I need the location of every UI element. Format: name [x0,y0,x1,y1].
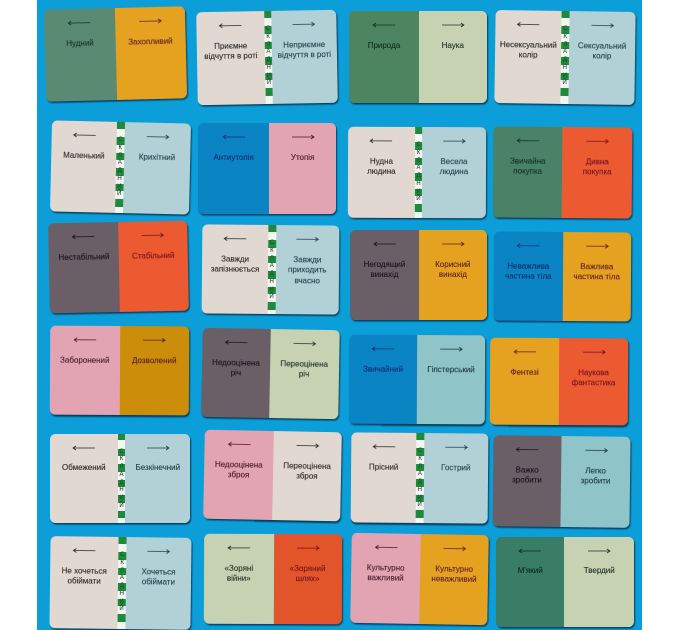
left side: Недооцінена річ [201,328,270,418]
strip: СКЛАДНИЙ: Д [117,167,122,174]
strip: СКЛАДНИЙ: С [417,448,422,454]
strip: СКЛАДНИЙ: К [563,33,567,39]
left side: Антиутопія: Антиутопія [213,153,254,162]
right side: Весела людина: людина [440,167,468,176]
left side: Фентезі: Фентезі [510,367,539,376]
strip: СКЛАДНИЙ: С [120,552,124,558]
strip: СКЛАДНИЙ: С [119,449,124,455]
strip: СКЛАДНИЙ: Н [562,64,567,70]
left side: Прісний: Прісний [368,462,398,472]
card: Завжди запізнюється / Завжди приходить вчасно [201,224,339,315]
strip: СКЛАДНИЙ: К [267,34,270,40]
left side: Культурно важливий [350,533,420,624]
strip: СКЛАДНИЙ: А [563,49,567,55]
left side: М'який: М'який [518,566,543,575]
strip: СКЛАДНИЙ: К [418,456,421,462]
left side: Неважлива частина тіла: частина тіла [505,272,551,281]
right side: Гострий: Гострий [441,463,470,472]
left side: «Зоряні війни» [204,534,274,624]
right side: Весела людина [422,127,486,217]
right side: Дозволений [119,326,189,415]
left side: Нудний [44,8,117,102]
right side: Сексуальний колір: Сексуальний [577,40,626,50]
strip: СКЛАДНИЙ [115,121,124,213]
left side: Не хочеться обіймати: обіймати [67,576,100,585]
left side: Природа: Природа [368,40,400,50]
right side: Крихітний [122,122,191,214]
strip: СКЛАДНИЙ: А [120,472,124,478]
right side: Наукова фантастика: фантастика [572,378,615,387]
left side: Важко зробити: зробити [512,475,541,485]
strip: СКЛАДНИЙ: С [563,26,567,32]
card: Культурно важливий / Культурно неважливий [350,533,488,625]
right side: Завжди приходить вчасно: приходить [288,265,326,274]
strip: СКЛАДНИЙ: С [118,136,123,143]
card: Природа / Наука [349,11,487,103]
left side: Звичайна покупка: Звичайна [510,156,545,165]
left side: Нудна людина [348,126,415,217]
strip: СКЛАДНИЙ: Л [417,157,421,163]
left side: «Зоряні війни»: «Зоряні [225,564,253,573]
right side: Стабільний: Стабільний [132,250,175,260]
card: Заборонений / Дозволений [50,325,189,415]
right side: Завжди приходить вчасно [275,225,339,315]
card: Маленький / Крихітний [50,120,191,214]
left side: Не хочеться обіймати [49,536,118,628]
right side: Важлива частина тіла: частина тіла [574,272,620,282]
strip: СКЛАДНИЙ [415,433,424,523]
strip: СКЛАДНИЙ: И [417,495,421,501]
strip: СКЛАДНИЙ: Н [417,487,422,493]
left side: Несексуальний колір: Несексуальний [499,39,556,49]
strip: СКЛАДНИЙ: С [266,26,270,32]
left side: Завжди запізнюється: запізнюється [210,264,259,274]
right side: Переоцінена річ: річ [298,370,309,379]
card: Неважлива частина тіла / Важлива частина тіла [494,232,631,322]
left side: Нестабільний: Нестабільний [59,252,110,262]
strip: СКЛАДНИЙ [415,127,423,217]
right side: Важлива частина тіла: Важлива [580,262,613,271]
right side: Культурно неважливий: неважливий [431,574,476,584]
right side: Неприємне відчуття в роті: Неприємне [283,40,325,49]
left side: Культурно важливий: важливий [367,573,403,583]
card: Негодящий винахід / Корисний винахід [350,230,487,320]
strip: СКЛАДНИЙ: К [118,144,122,150]
strip: СКЛАДНИЙ [118,434,125,523]
right side: Дивна покупка: Дивна [585,156,608,165]
strip: СКЛАДНИЙ: И [269,286,273,292]
card: Прісний / Гострий [350,433,488,523]
right side: Утопія [269,123,336,214]
right side: Наукова фантастика [559,338,628,425]
right side: Культурно неважливий: Культурно [435,564,473,573]
strip: СКЛАДНИЙ: Д [119,583,123,589]
strip: СКЛАДНИЙ: И [267,73,271,79]
right side: Переоцінена зброя: зброя [296,472,318,481]
right side: Наука: Наука [442,40,464,50]
left side: Антиутопія [198,123,269,214]
right side: Сексуальний колір [568,11,635,104]
left side: М'який [496,537,564,627]
card: Недооцінена річ / Переоцінена річ [201,328,339,419]
card: Фентезі / Наукова фантастика [490,337,628,425]
strip: СКЛАДНИЙ: Й [119,606,123,612]
strip: СКЛАДНИЙ: А [267,49,271,55]
right side: Твердий: Твердий [584,566,615,575]
left side: Негодящий винахід [350,230,419,320]
left side: Неважлива частина тіла [494,232,563,322]
card: «Зоряні війни» / «Зоряний шлях» [204,534,342,624]
card: Звичайна покупка / Дивна покупка [492,126,632,218]
right side: Дивна покупка [561,127,632,218]
strip: СКЛАДНИЙ: Л [563,41,567,47]
card: Не хочеться обіймати / Хочеться обіймати [49,536,191,629]
strip: СКЛАДНИЙ: Д [417,173,421,179]
left side: Приємне відчуття в роті: відчуття в роті [204,51,258,61]
right side: Наукова фантастика: Наукова [578,367,609,377]
strip: СКЛАДНИЙ: Н [269,279,273,285]
strip: СКЛАДНИЙ: А [417,471,421,477]
left side: Недооцінена зброя [203,430,274,520]
strip: СКЛАДНИЙ [560,11,569,103]
card: Важко зробити / Легко зробити [492,435,630,527]
right side: Переоцінена річ: Переоцінена [280,359,328,369]
right side: Завжди приходить вчасно: вчасно [294,276,319,285]
strip: СКЛАДНИЙ: Н [119,487,124,493]
strip: СКЛАДНИЙ: С [269,240,274,246]
left side: Фентезі [490,337,559,425]
strip: СКЛАДНИЙ: И [117,183,121,189]
strip: СКЛАДНИЙ [117,537,126,628]
card: Нестабільний / Стабільний [49,221,189,314]
card: Нудна людина / Весела людина [348,126,486,217]
strip: СКЛАДНИЙ: И [562,72,566,78]
left side: Негодящий винахід: винахід [370,270,399,279]
right side: Корисний винахід: винахід [439,270,467,279]
strip: СКЛАДНИЙ: Н [417,180,421,186]
strip: СКЛАДНИЙ: Л [120,464,124,470]
left side: Маленький [50,120,117,212]
left side: Нудний: Нудний [66,38,94,48]
strip: СКЛАДНИЙ: Й [119,503,124,509]
strip: СКЛАДНИЙ: И [119,495,124,501]
strip: СКЛАДНИЙ: Л [118,152,122,158]
right side: Сексуальний колір: колір [592,51,611,60]
card: Нудний / Захопливий [44,6,187,102]
strip: СКЛАДНИЙ [264,11,273,104]
strip: СКЛАДНИЙ: И [119,598,123,604]
left side: Звичайний: Звичайний [363,364,403,373]
strip: СКЛАДНИЙ: Й [416,196,421,202]
right side: Гіпстерський [417,335,485,424]
strip: СКЛАДНИЙ: Л [120,567,124,573]
left side: Маленький: Маленький [63,150,104,160]
strip: СКЛАДНИЙ: И [417,188,421,194]
left side: Приємне відчуття в роті [196,11,266,105]
strip: СКЛАДНИЙ: Л [266,42,271,48]
card: Недооцінена зброя / Переоцінена зброя [203,430,342,521]
right side: Хочеться обіймати: обіймати [141,577,175,586]
strip: СКЛАДНИЙ [267,225,275,314]
left side: Обмежений: Обмежений [62,463,106,472]
right side: Хочеться обіймати [125,537,191,629]
card: Звичайний / Гіпстерський [349,334,485,424]
right side: Захопливий [114,6,187,100]
left side: Культурно важливий: Культурно [366,562,404,572]
strip: СКЛАДНИЙ: Н [119,590,124,596]
left side: Нудна людина: людина [367,167,396,176]
left side: Приємне відчуття в роті: Приємне [214,41,248,51]
left side: Природа [349,11,419,103]
right side: «Зоряний шлях»: «Зоряний [290,564,326,573]
right side: Весела людина: Весела [441,156,468,165]
card: Антиутопія / Утопія [198,123,336,214]
left side: Заборонений: Заборонений [60,355,109,364]
right side: Легко зробити [560,436,630,527]
left side: Звичайний [349,334,417,423]
right side: Неприємне відчуття в роті: відчуття в роті [278,50,331,60]
left side: Недооцінена річ: Недооцінена [212,358,260,367]
right side: Переоцінена зброя [272,431,342,521]
strip: СКЛАДНИЙ: А [118,160,122,166]
right side: Утопія: Утопія [291,153,314,162]
strip: СКЛАДНИЙ: Н [267,65,271,71]
strip: СКЛАДНИЙ: Д [267,57,271,63]
left side: Неважлива частина тіла: Неважлива [507,261,549,271]
left side: Недооцінена зброя: Недооцінена [215,460,263,470]
strip: СКЛАДНИЙ: Й [562,80,566,86]
strip: СКЛАДНИЙ: Й [267,80,271,86]
left side: «Зоряні війни»: війни» [227,574,251,583]
left side: Негодящий винахід: Негодящий [364,260,405,268]
left side: Важко зробити [492,435,561,526]
right side: Корисний винахід [419,230,487,320]
right side: Хочеться обіймати: Хочеться [141,566,175,576]
right side: Важлива частина тіла [562,232,631,322]
left side: Нудна людина: Нудна [370,156,393,165]
left side: Прісний [350,433,416,523]
left side: Обмежений [50,434,118,523]
left side: Недооцінена зброя: зброя [228,470,249,480]
left side: Нестабільний [49,222,121,314]
right side: Легко зробити: зробити [580,476,610,485]
left side: Заборонений [50,325,120,414]
left side: Несексуальний колір [494,10,561,103]
card: Обмежений / Безкінечний [50,434,190,523]
left side: Завжди запізнюється [201,224,268,314]
strip: СКЛАДНИЙ: А [269,263,273,269]
right side: Дозволений: Дозволений [132,355,176,364]
right side: Гострий [423,433,488,523]
right side: Культурно неважливий [419,534,488,625]
right side: Безкінечний: Безкінечний [136,463,180,472]
strip: СКЛАДНИЙ: Д [417,479,421,485]
right side: Корисний винахід: Корисний [435,260,471,268]
strip: СКЛАДНИЙ: Л [418,464,422,470]
left side: Звичайна покупка: покупка [513,166,542,175]
card: М'який / Твердий [496,537,634,627]
right side: Безкінечний [125,434,190,523]
strip: СКЛАДНИЙ: Й [269,294,273,300]
card: Приємне відчуття в роті / Неприємне відчуття в роті [196,10,337,105]
right side: Переоцінена зброя: Переоцінена [283,461,331,471]
left side: Недооцінена річ: річ [230,368,241,378]
right side: Неприємне відчуття в роті [272,10,337,104]
left side: Завжди запізнюється: Завжди [221,254,249,263]
strip: СКЛАДНИЙ: Л [269,255,273,261]
right side: Переоцінена річ [269,329,339,419]
strip: СКЛАДНИЙ: Д [562,57,567,63]
strip: СКЛАДНИЙ: Д [269,271,273,277]
right side: «Зоряний шлях» [274,534,342,624]
strip: СКЛАДНИЙ: А [119,575,124,581]
right side: Гіпстерський: Гіпстерський [427,364,475,373]
strip: СКЛАДНИЙ: Й [417,502,421,508]
right side: Завжди приходить вчасно: Завжди [293,254,321,264]
right side: Твердий [564,537,634,627]
left side: Несексуальний колір: колір [518,50,537,59]
right side: «Зоряний шлях»: шлях» [296,574,320,583]
left side: Важко зробити: Важко [515,465,538,474]
strip: СКЛАДНИЙ: Й [117,191,121,197]
right side: Стабільний [119,221,189,312]
strip: СКЛАДНИЙ: К [120,559,123,565]
right side: Захопливий: Захопливий [128,36,173,46]
right side: Крихітний: Крихітний [139,151,175,161]
left side: Не хочеться обіймати: Не хочеться [61,565,106,575]
strip: СКЛАДНИЙ: Д [120,480,124,486]
card: Несексуальний колір / Сексуальний колір [494,10,635,104]
right side: Наука [419,11,487,103]
right side: Легко зробити: Легко [585,466,606,475]
strip: СКЛАДНИЙ: К [120,456,123,462]
strip: СКЛАДНИЙ: С [417,142,421,148]
strip: СКЛАДНИЙ: Н [117,175,122,181]
strip: СКЛАДНИЙ: К [417,149,421,155]
strip: СКЛАДНИЙ: А [417,165,421,171]
right side: Дивна покупка: покупка [582,167,611,176]
strip: СКЛАДНИЙ: К [270,248,273,254]
left side: Звичайна покупка [492,126,562,217]
